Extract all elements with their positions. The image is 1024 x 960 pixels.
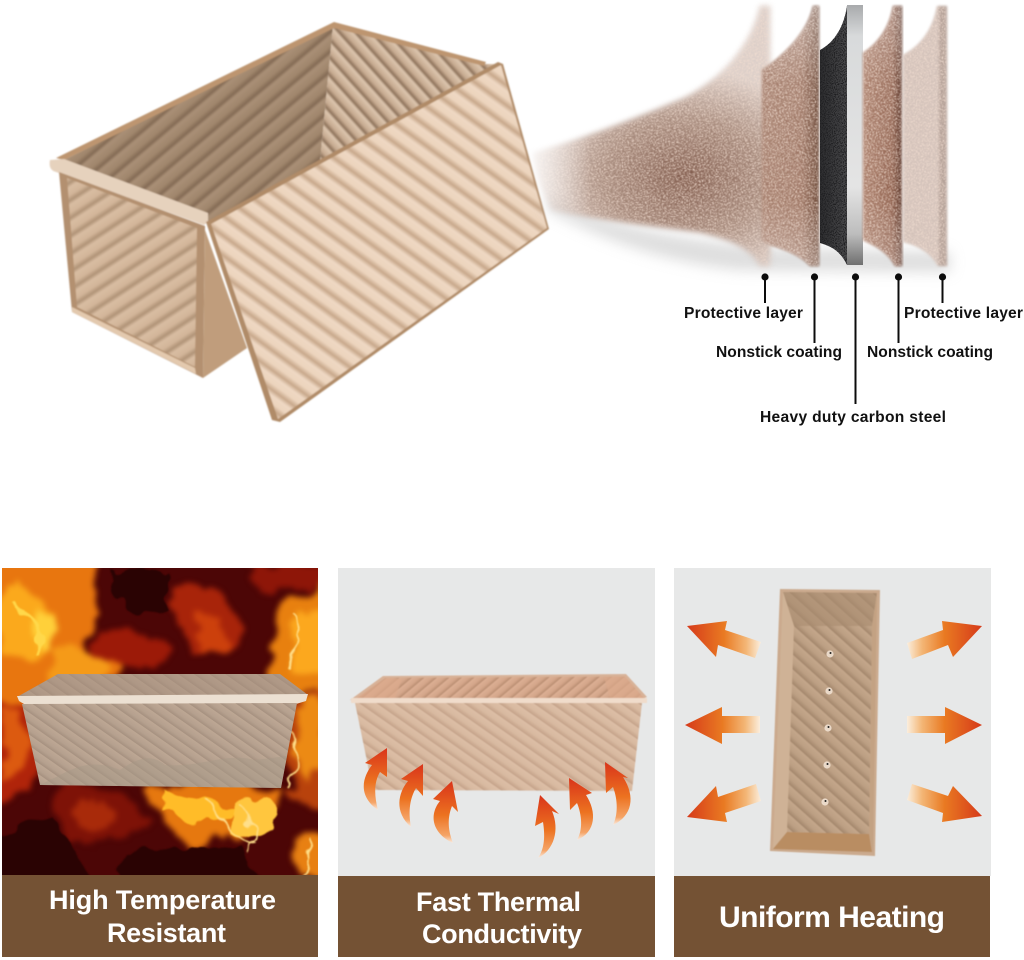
- caption: Fast Thermal: [416, 887, 581, 917]
- arrow top left: [687, 621, 761, 658]
- caption band: [674, 876, 990, 957]
- label: nonstick right: Nonstick coating: [867, 344, 993, 361]
- arrow bottom left: [687, 784, 761, 822]
- arrow top right: [907, 621, 982, 659]
- nonstick coating right: [863, 6, 902, 266]
- pan side under lid: [203, 230, 247, 378]
- pan from above: top wall: [783, 592, 877, 626]
- label: protective layer right: Protective layer: [904, 305, 1023, 322]
- panel: high temperature resistant: [2, 568, 318, 957]
- pan on fire: rim: [17, 694, 308, 704]
- cross-section diagram: [533, 5, 950, 272]
- spray shadow: [548, 196, 950, 272]
- heat arrow 4: [535, 795, 559, 858]
- caption band: [338, 876, 655, 957]
- leader: nonstick left: [811, 273, 818, 343]
- outer protective layer left: [533, 6, 770, 266]
- pan rim: [56, 22, 486, 160]
- heat arrow 3: [433, 781, 458, 843]
- heat arrow 2: [399, 764, 423, 827]
- panel background: [674, 568, 991, 876]
- pan: back rim: [350, 674, 647, 700]
- panel: fast thermal conductivity: [338, 568, 655, 957]
- pan front face: [59, 172, 205, 378]
- pan from above: rim: [770, 589, 880, 856]
- pan on fire: lid top: [17, 674, 308, 697]
- panel: uniform heating: [674, 568, 991, 957]
- leader: protective layer left: [761, 273, 769, 303]
- heat arrow 6: [605, 762, 631, 825]
- nonstick coating left: [762, 6, 819, 266]
- pan right inner wall: [320, 26, 498, 162]
- arrow middle left: [685, 707, 760, 744]
- arrow bottom right: [907, 784, 982, 822]
- lid: [206, 62, 549, 422]
- panel: fast thermal conductivity: Conductivity: [422, 919, 582, 949]
- heat arrow 1: [364, 748, 387, 810]
- pan back inner wall: [58, 26, 333, 222]
- label: carbon steel: Heavy duty carbon steel: [760, 409, 946, 426]
- pan from above: floor: [787, 626, 872, 834]
- holes in the floor: [821, 650, 834, 806]
- carbon steel bright edge: [847, 5, 863, 265]
- pan: front rim: [351, 698, 647, 703]
- label: protective layer left: Protective layer: [684, 305, 803, 322]
- heat arrow 5: [569, 778, 593, 840]
- panel background: [338, 568, 655, 876]
- leader: protective layer right: [939, 273, 946, 303]
- leader: nonstick right: [895, 273, 902, 343]
- pan: body: [355, 703, 642, 791]
- leader: carbon steel: [852, 273, 859, 404]
- caption: High Temperature: [49, 885, 276, 915]
- caption band: [2, 875, 318, 957]
- caption: Uniform Heating: [719, 901, 945, 934]
- panel: high temperature resistant: Resistant: [107, 918, 226, 948]
- pan on fire: body: [22, 703, 297, 788]
- fire background: [2, 568, 318, 875]
- arrow middle right: [907, 707, 982, 744]
- product photo: loaf pan with lid: [50, 22, 549, 422]
- pan from above: left wall: [773, 592, 794, 849]
- label: nonstick left: Nonstick coating: [716, 344, 842, 361]
- outer protective layer right: [903, 6, 947, 266]
- pan from above: bottom wall: [773, 832, 872, 852]
- leader lines and labels: [684, 273, 1023, 426]
- carbon steel dark face: [820, 6, 847, 265]
- pan from above: right wall: [869, 593, 877, 853]
- pan: interior: [352, 675, 645, 700]
- pan front rim bar: [50, 159, 208, 225]
